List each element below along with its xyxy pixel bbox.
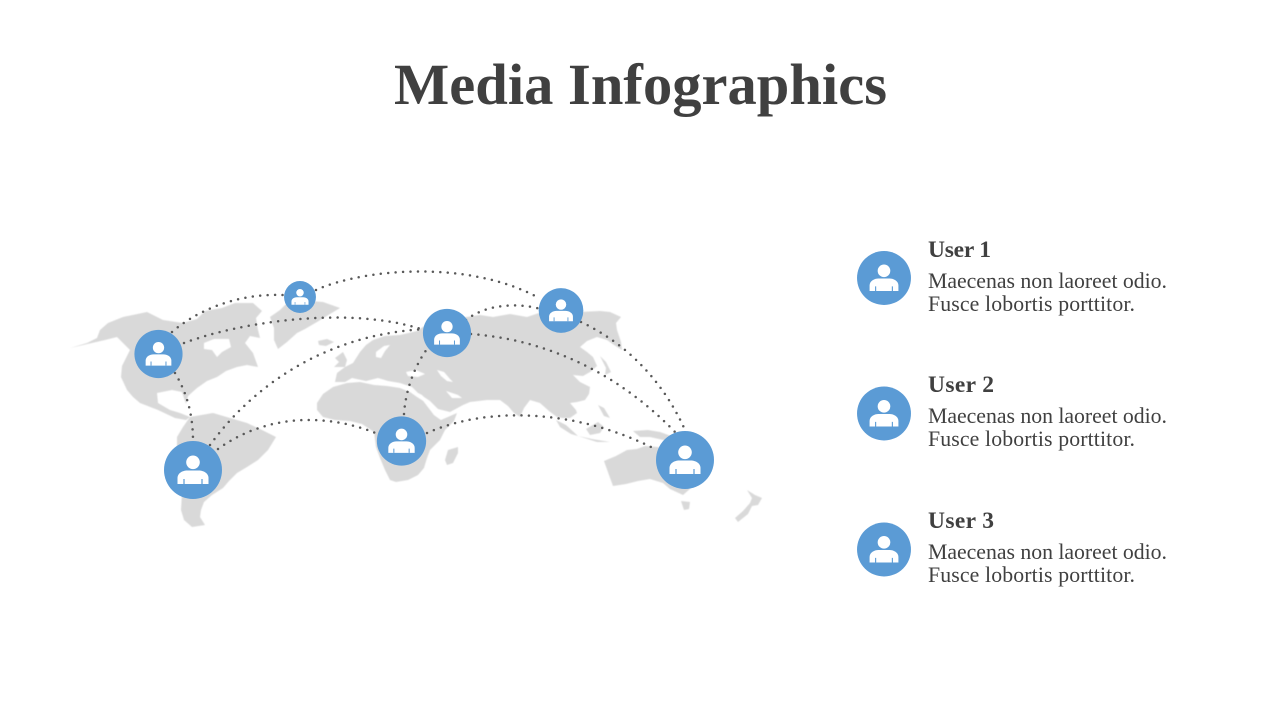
Persian Gulf [446,391,462,398]
Tasmania [681,501,690,510]
description: User 3: Maecenas non laoreet odio. [928,540,1167,564]
Red Sea [418,393,441,420]
description: User 2: Fusce lobortis porttitor. [928,427,1135,451]
description: User 2: Maecenas non laoreet odio. [928,404,1167,428]
icon: User 2 [857,387,911,440]
continent: Australia [604,446,693,495]
heading: User 2: User 2 [928,372,994,398]
node: Europe user [423,309,471,357]
heading: User 3: User 3 [928,508,994,534]
world map [70,301,762,527]
Iceland [318,339,334,346]
dotted connection arcs [172,272,685,450]
description: User 1: Maecenas non laoreet odio. [928,269,1167,293]
continent: Greenland [270,301,340,349]
node: Australia user [656,431,714,489]
continent: Eurasia [335,311,622,418]
heading: User 1: User 1 [928,237,991,263]
Baltic Sea [376,345,390,358]
New Zealand [735,490,762,522]
Hudson Bay [204,339,231,357]
node: North America user [134,330,183,378]
Java [578,436,610,442]
Philippines [598,405,610,418]
continent: South America [177,413,276,527]
Caspian Sea [437,370,453,382]
node: South America user [164,441,222,499]
description: User 2 [928,404,1167,451]
New Guinea [633,430,674,441]
continent: Africa [317,382,457,482]
description: User 3: Fusce lobortis porttitor. [928,563,1135,587]
Japan [600,356,611,375]
node: Africa user [377,416,426,466]
description: User 1 [928,269,1167,316]
legend item: User 3 [857,508,1167,587]
icon: User 3 [857,523,911,576]
node: Siberia user [539,288,583,333]
icon: User 1 [857,251,911,305]
description: User 1: Fusce lobortis porttitor. [928,292,1135,316]
legend item: User 2 [857,372,1167,451]
Sumatra [556,420,578,436]
Borneo [586,422,604,435]
title: Media Infographics [394,52,887,117]
continent: North America [70,303,262,420]
Madagascar [445,447,458,465]
Black Sea [406,370,425,377]
British Isles [334,352,347,367]
description: User 3 [928,540,1167,587]
node: Greenland user [284,281,316,313]
legend item: User 1 [857,237,1167,316]
